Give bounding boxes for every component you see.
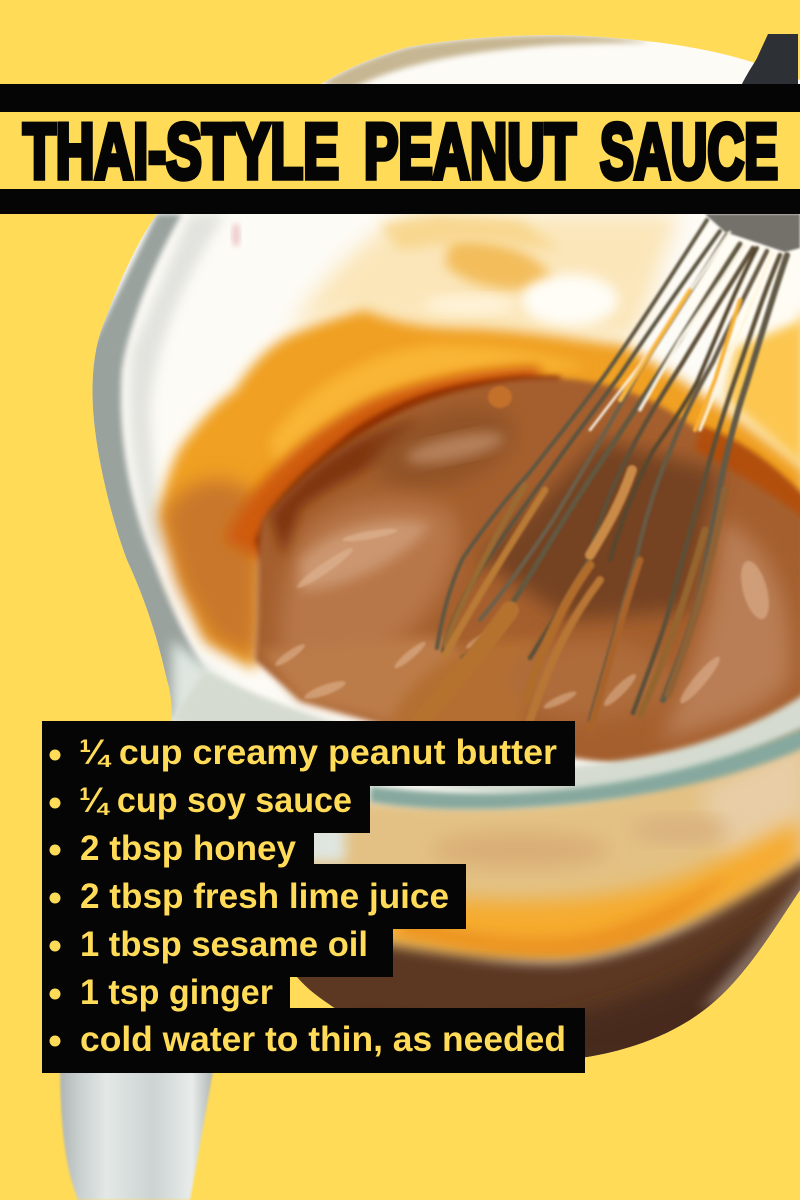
sauce upper fold gloss (404, 426, 506, 470)
deep red sauce edge (255, 376, 560, 560)
banner top black bar (0, 84, 800, 112)
title: THAI-STYLE (23, 107, 339, 195)
bright orange highlight (270, 344, 572, 463)
yellow smear top (380, 215, 560, 250)
pink smudge on glass (232, 223, 240, 247)
sauce lit mound (280, 500, 458, 667)
glass wall grey wash (129, 214, 225, 560)
darker base bottom (360, 900, 800, 1070)
list black background (42, 721, 585, 1073)
pale glass beside the list (172, 640, 345, 862)
sauce gloss centre (522, 642, 665, 718)
banner yellow band (0, 112, 800, 189)
ingredient 3: 2 tbsp honey (80, 829, 297, 868)
orange glow band (320, 820, 800, 958)
tan patches right (630, 818, 730, 842)
orange lower left glaze (162, 479, 262, 660)
bright yellow right band (725, 310, 800, 470)
sauce dark area behind whisk (480, 440, 720, 620)
lower sauce glossy mass (264, 634, 459, 721)
dark sauce in base (280, 858, 800, 1070)
front rim glass (172, 670, 800, 793)
whisk wires (437, 220, 787, 720)
peach smear (445, 239, 556, 290)
ingredient 2: ¼ cup soy sauce (79, 781, 352, 820)
peanut blob (488, 386, 512, 408)
whisk handle top (742, 34, 798, 84)
sauce gloss right (660, 520, 791, 740)
ingredient 4: 2 tbsp fresh lime juice (80, 877, 449, 916)
tan patches (430, 832, 610, 868)
front glass tan band (297, 728, 800, 994)
title: PEANUT (364, 107, 576, 195)
white highlight on film (522, 274, 618, 326)
upper rim tint (322, 35, 648, 84)
sauce mound gloss (300, 521, 430, 590)
wire highlights (590, 232, 730, 430)
banner bottom black bar (0, 189, 800, 214)
banner (0, 84, 800, 214)
sauce main body (255, 378, 800, 765)
sauce upper fold (374, 406, 514, 490)
glass left wall (80, 214, 205, 722)
ingredient 1: ¼ cup creamy peanut butter (79, 733, 557, 772)
photo: jug handle (60, 1060, 215, 1200)
ingredient 5: 1 tbsp sesame oil (80, 925, 368, 964)
teal rim shadow (370, 725, 800, 809)
ingredient list (42, 721, 585, 1073)
red-orange glow by the sauce edge (225, 366, 540, 560)
cream sauce film (290, 214, 680, 340)
peanut-coated whisk wires (420, 470, 725, 730)
right dark orange sauce edge (695, 425, 800, 520)
white right wall (730, 306, 800, 352)
whisk handle collar (705, 214, 800, 252)
orange deep band (400, 875, 730, 958)
sauce lower orange drip mass (390, 641, 532, 721)
dark shadow above mound (270, 420, 420, 560)
white highlight on film left (424, 295, 516, 315)
ingredient 7: cold water to thin, as needed (80, 1020, 566, 1059)
orange band (160, 310, 800, 670)
grey right edge of base (700, 870, 800, 1010)
small gloss highlights (273, 526, 774, 711)
ingredient 6: 1 tsp ginger (80, 973, 273, 1012)
front glass pale right corner (700, 740, 800, 870)
